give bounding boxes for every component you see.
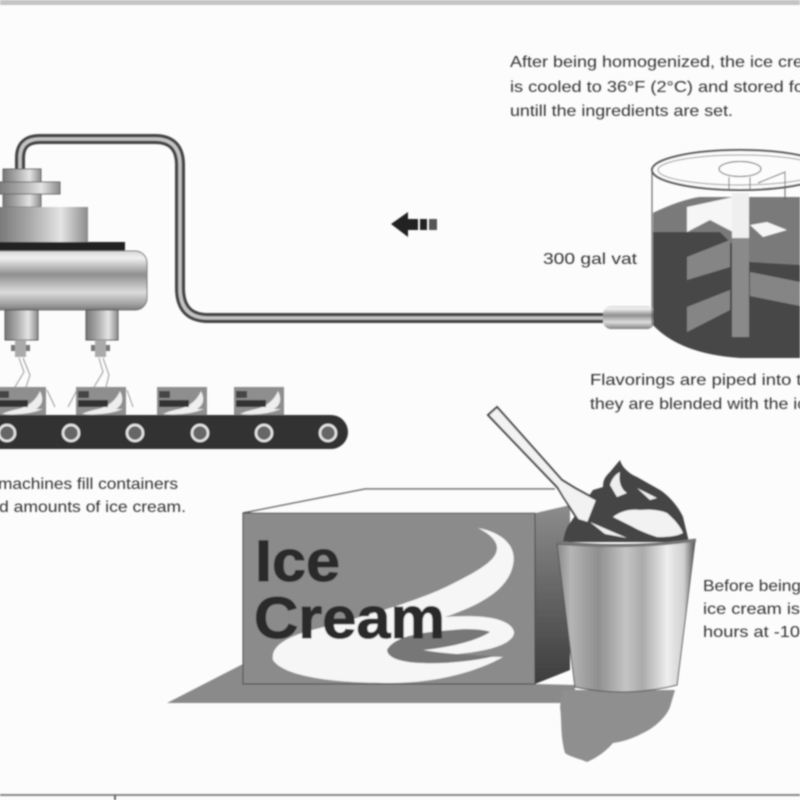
conveyor belt (0, 415, 348, 449)
left nozzle (5, 310, 55, 407)
caption: flavorings: Flavorings are piped into the (590, 372, 800, 389)
caption: homogenized: After being homogenized, the ice cream (510, 54, 800, 71)
motor cylinder (0, 207, 88, 243)
swirl (273, 528, 514, 683)
cup shadow (560, 690, 675, 762)
caption: filling machines: d amounts of ice cream. (0, 499, 186, 516)
box label: Cream (254, 586, 445, 651)
mixer paddles (687, 197, 733, 232)
spoon (488, 407, 597, 523)
caption: before being: Before being (703, 578, 800, 595)
caption: before being: hours at -10 (703, 624, 800, 641)
caption: filling machines (0, 476, 186, 516)
caption: homogenized (510, 54, 800, 120)
ice cream scoop (563, 460, 689, 542)
flow direction arrow (391, 212, 437, 237)
vat outline and lid (651, 172, 653, 325)
black plate (0, 242, 125, 252)
vat body with mix (653, 197, 800, 358)
outlet fitting (603, 306, 655, 329)
caption: filling machines: machines fill containers (0, 476, 178, 493)
box front (243, 513, 535, 684)
box top (243, 489, 575, 513)
label: vat capacity: 300 gal vat (543, 251, 638, 268)
blending vat (603, 150, 800, 358)
caption: before being (703, 578, 800, 641)
manifold body (0, 251, 147, 310)
caption: flavorings: they are blended with the ice (590, 396, 800, 413)
caption: homogenized: untill the ingredients are set. (510, 103, 733, 120)
cast shadow (167, 664, 575, 703)
box label: Ice (255, 529, 340, 594)
pipe from vat to filling machine (20, 139, 610, 318)
caption: before being: ice cream is (703, 601, 800, 618)
ice cream box (167, 489, 575, 703)
right nozzle (68, 310, 133, 407)
metal cup (556, 540, 696, 692)
filling machine (0, 169, 147, 407)
ice cream containers on belt (0, 387, 284, 415)
caption: homogenized: is cooled to 36°F (2°C) and stored for (510, 79, 800, 96)
box label (254, 529, 445, 651)
caption: flavorings (590, 372, 800, 413)
flange stack (0, 169, 60, 207)
mixer shaft (732, 193, 749, 238)
box side (535, 505, 570, 684)
